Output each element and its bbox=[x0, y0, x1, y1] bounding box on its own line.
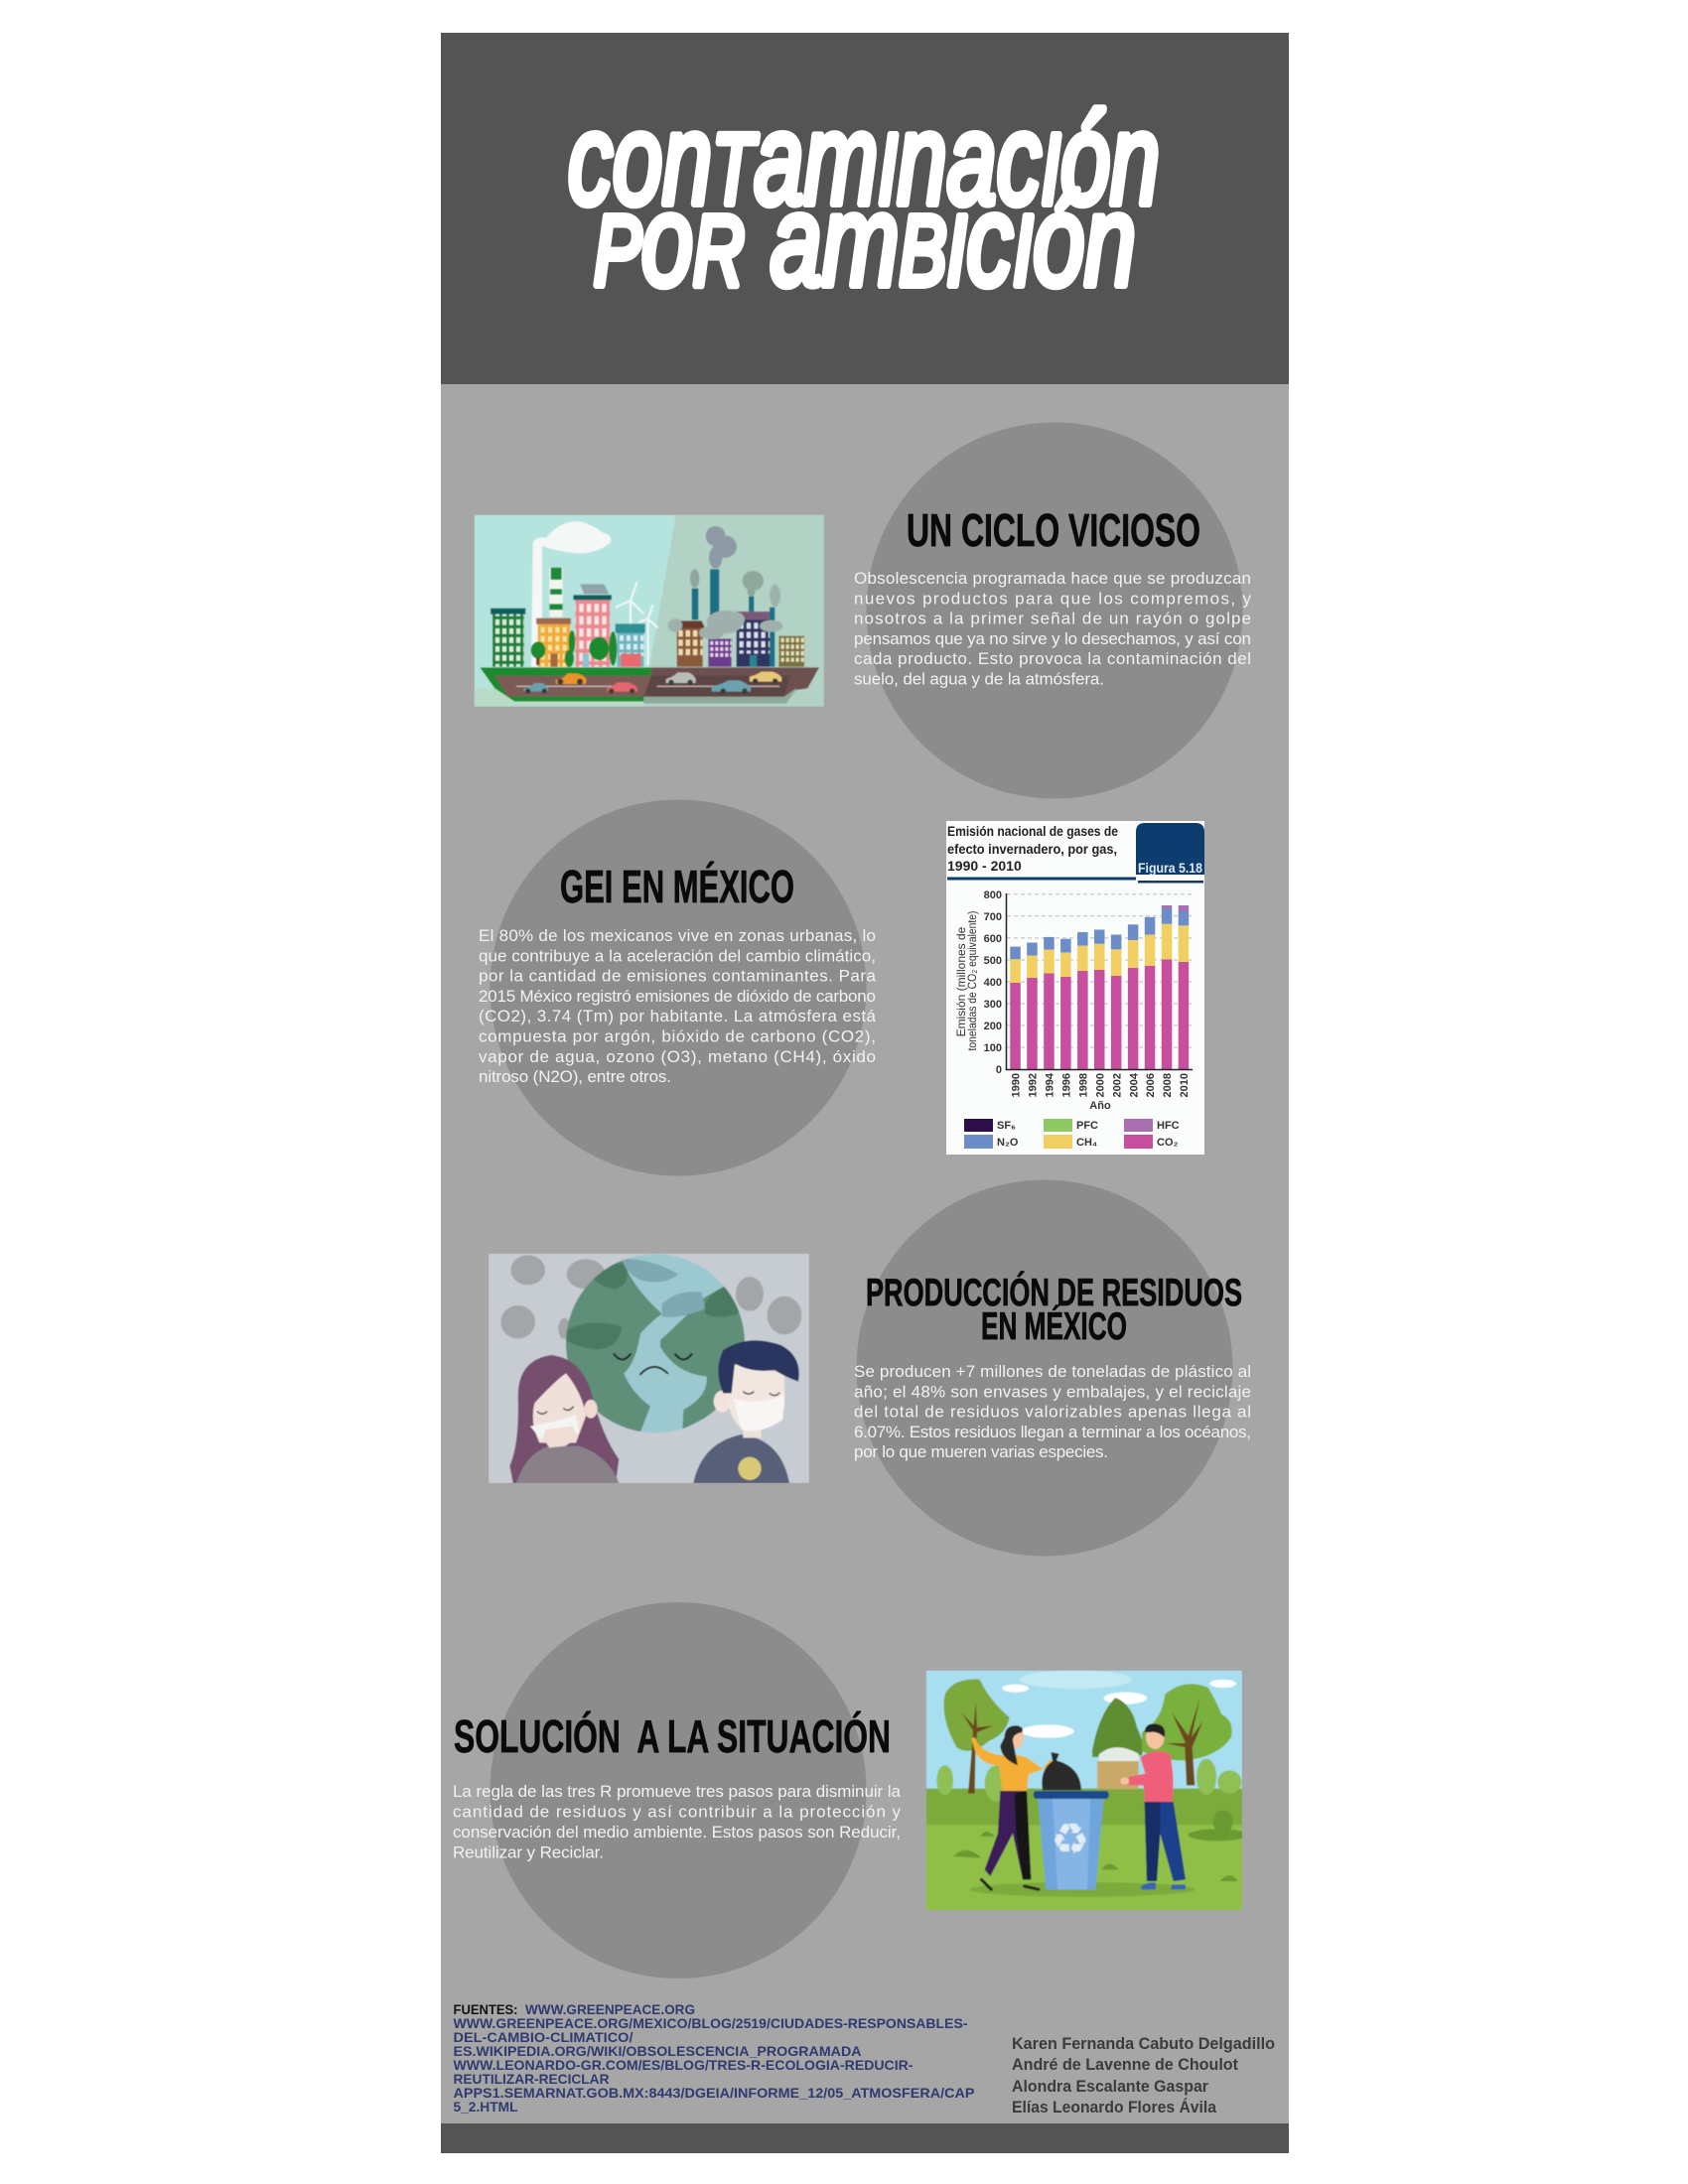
circle: residuos bbox=[856, 1179, 1233, 1557]
text: solucion a la situacion: cantidad de residuos y así contribuir a la protección y bbox=[453, 1803, 902, 1821]
text: produccion de residuos: 6.07%. Estos residuos llegan a terminar a los océanos, bbox=[854, 1423, 1251, 1441]
y axis labels: 300 bbox=[984, 999, 1002, 1011]
sources: WWW.LEONARDO-GR.COM/ES/BLOG/TRES-R-ECOLOGIA-REDUCIR- bbox=[453, 2057, 914, 2073]
illustration: people recycling in a park bbox=[926, 1670, 1248, 1911]
chart: emisión nacional de gases de efecto invernadero bbox=[946, 821, 1204, 1155]
y axis labels bbox=[984, 889, 1002, 1076]
text: GEI en Mexico: vapor de agua, ozono (O3), metano (CH4), óxido bbox=[479, 1047, 876, 1066]
circle: solucion bbox=[491, 1602, 866, 1979]
sources: DEL-CAMBIO-CLIMATICO/ bbox=[453, 2029, 633, 2045]
figure tag bbox=[1136, 823, 1204, 876]
chart title bbox=[947, 823, 1118, 874]
text: un ciclo vicioso: nosotros a la primer señal de un rayón o golpe bbox=[854, 610, 1251, 628]
y axis labels: 800 bbox=[984, 889, 1002, 901]
x axis labels: 1990 bbox=[1011, 1073, 1023, 1097]
sources: APPS1.SEMARNAT.GOB.MX:8443/DGEIA/INFORME_12/05_ATMOSFERA/CAP bbox=[453, 2085, 975, 2101]
sources: WWW.GREENPEACE.ORG/MEXICO/BLOG/2519/CIUDADES-RESPONSABLES- bbox=[453, 2015, 968, 2031]
sources: REUTILIZAR-RECICLAR bbox=[453, 2071, 610, 2087]
x axis labels: 2008 bbox=[1162, 1073, 1174, 1097]
chart legend: HFC bbox=[1157, 1120, 1180, 1132]
y axis labels: 200 bbox=[984, 1021, 1002, 1032]
x axis labels bbox=[1011, 1072, 1191, 1097]
heading: produccion de residuos bbox=[866, 1271, 1242, 1348]
text: un ciclo vicioso: pensamos que ya no sirve y lo desechamos, y así con bbox=[854, 629, 1251, 648]
text: un ciclo vicioso: suelo, del agua y de la atmósfera. bbox=[854, 669, 1104, 689]
heading: un ciclo vicioso: UN CICLO VICIOSO bbox=[907, 504, 1200, 556]
authors: Elías Leonardo Flores Ávila bbox=[1012, 2098, 1216, 2116]
sources: FUENTES: bbox=[453, 2001, 518, 2017]
text: GEI en Mexico: que contribuye a la aceleración del cambio climático, bbox=[479, 946, 876, 965]
text: GEI en Mexico: nitroso (N2O), entre otros. bbox=[479, 1067, 671, 1086]
y axis labels: 0 bbox=[996, 1064, 1002, 1076]
panel: page background bbox=[441, 33, 1289, 2153]
chart legend bbox=[964, 1119, 1180, 1149]
chart title: 1990 - 2010 bbox=[947, 858, 1022, 874]
circle: ciclo vicioso bbox=[866, 423, 1243, 798]
heading: GEI en Mexico: GEI EN MÉXICO bbox=[560, 861, 794, 912]
illustration: people recycling in a park: ♻ bbox=[1051, 1815, 1089, 1864]
y axis labels: 100 bbox=[984, 1042, 1002, 1054]
x axis labels: 2004 bbox=[1128, 1072, 1140, 1097]
text: GEI en Mexico: (CO2), 3.74 (Tm) por habitante. La atmósfera está bbox=[479, 1007, 877, 1025]
panel: title header bbox=[441, 33, 1289, 384]
x axis labels: 2006 bbox=[1145, 1073, 1157, 1097]
y axis labels: 400 bbox=[984, 977, 1002, 989]
text: produccion de residuos: por lo que mueren varias especies. bbox=[854, 1442, 1108, 1461]
text: GEI en Mexico: por la cantidad de emisiones contaminantes. Para bbox=[479, 967, 877, 986]
y axis labels: 500 bbox=[984, 955, 1002, 967]
x axis labels: 2010 bbox=[1179, 1073, 1191, 1097]
sources: WWW.GREENPEACE.ORG bbox=[525, 2001, 695, 2017]
sources: 5_2.HTML bbox=[453, 2099, 518, 2115]
y axis title bbox=[954, 911, 979, 1050]
text: un ciclo vicioso bbox=[854, 569, 1251, 689]
text: GEI en Mexico: compuesta por argón, bióxido de carbono (CO2), bbox=[479, 1026, 876, 1046]
sources: ES.WIKIPEDIA.ORG/WIKI/OBSOLESCENCIA_PROGRAMADA bbox=[453, 2043, 862, 2059]
text: solucion a la situacion: Reutilizar y Reciclar. bbox=[453, 1843, 604, 1862]
plot grid and axes bbox=[1007, 894, 1194, 1047]
text: solucion a la situacion bbox=[453, 1782, 902, 1862]
text: produccion de residuos bbox=[854, 1362, 1251, 1461]
footer band bbox=[441, 2123, 1289, 2153]
authors: André de Lavenne de Choulot bbox=[1012, 2055, 1238, 2074]
y axis title: toneladas de CO₂ equivalente) bbox=[965, 911, 979, 1050]
text: GEI en Mexico: El 80% de los mexicanos vive en zonas urbanas, lo bbox=[479, 926, 876, 945]
circle: GEI bbox=[491, 800, 866, 1175]
illustration: clean city versus polluted city bbox=[475, 515, 824, 707]
text: solucion a la situacion: conservación del medio ambiente. Estos pasos son Reducir, bbox=[453, 1823, 901, 1842]
illustration: sad earth and people with masks bbox=[489, 1254, 809, 1483]
authors bbox=[1012, 2034, 1275, 2116]
x axis labels: 2002 bbox=[1112, 1073, 1124, 1097]
text: solucion a la situacion: La regla de las tres R promueve tres pasos para disminuir la bbox=[453, 1782, 902, 1801]
chart title: efecto invernadero, por gas, bbox=[947, 841, 1117, 857]
x axis title: Año bbox=[1089, 1100, 1111, 1112]
y axis labels: 700 bbox=[984, 911, 1002, 923]
authors: Karen Fernanda Cabuto Delgadillo bbox=[1012, 2034, 1275, 2053]
text: un ciclo vicioso: cada producto. Esto provoca la contaminación del bbox=[854, 649, 1251, 668]
text: produccion de residuos: del total de residuos valorizables apenas llega al bbox=[854, 1403, 1251, 1422]
authors: Alondra Escalante Gaspar bbox=[1012, 2077, 1208, 2096]
y axis labels: 600 bbox=[984, 933, 1002, 945]
figure tag: Figura 5.18 bbox=[1138, 861, 1202, 876]
title: conTamInacIón bbox=[568, 86, 1160, 231]
stacked bars bbox=[1010, 905, 1189, 1070]
text: produccion de residuos: año; el 48% son envases y embalajes, y el reciclaje bbox=[854, 1382, 1251, 1401]
chart legend: CH₄ bbox=[1076, 1137, 1097, 1149]
x axis labels: 1998 bbox=[1078, 1073, 1090, 1097]
chart legend: N₂O bbox=[997, 1137, 1019, 1149]
title bbox=[568, 86, 1160, 313]
chart legend: PFC bbox=[1076, 1120, 1098, 1132]
heading: solucion a la situacion: SOLUCIÓN A LA SITUACIÓN bbox=[454, 1710, 891, 1762]
heading: produccion de residuos: EN MÉXICO bbox=[981, 1304, 1127, 1348]
x axis labels: 1992 bbox=[1027, 1073, 1039, 1097]
chart legend: SF₆ bbox=[997, 1120, 1016, 1132]
text: GEI en Mexico: 2015 México registró emisiones de dióxido de carbono bbox=[479, 987, 876, 1006]
x axis labels: 1996 bbox=[1060, 1073, 1072, 1097]
sources bbox=[453, 2001, 975, 2115]
y axis title: Emisión (millones de bbox=[954, 926, 968, 1036]
heading: produccion de residuos: PRODUCCIÓN DE RESIDUOS bbox=[866, 1271, 1242, 1314]
title: PoR amBIcIón bbox=[594, 168, 1136, 313]
chart legend: CO₂ bbox=[1157, 1137, 1178, 1149]
text: un ciclo vicioso: nuevos productos para que los compremos, y bbox=[854, 589, 1251, 608]
x axis labels: 1994 bbox=[1045, 1072, 1056, 1097]
text: produccion de residuos: Se producen +7 millones de toneladas de plástico al bbox=[854, 1362, 1251, 1381]
x axis labels: 2000 bbox=[1094, 1073, 1106, 1097]
text: GEI en Mexico bbox=[479, 926, 877, 1086]
text: un ciclo vicioso: Obsolescencia programada hace que se produzcan bbox=[854, 569, 1251, 588]
chart title: Emisión nacional de gases de bbox=[947, 823, 1118, 839]
